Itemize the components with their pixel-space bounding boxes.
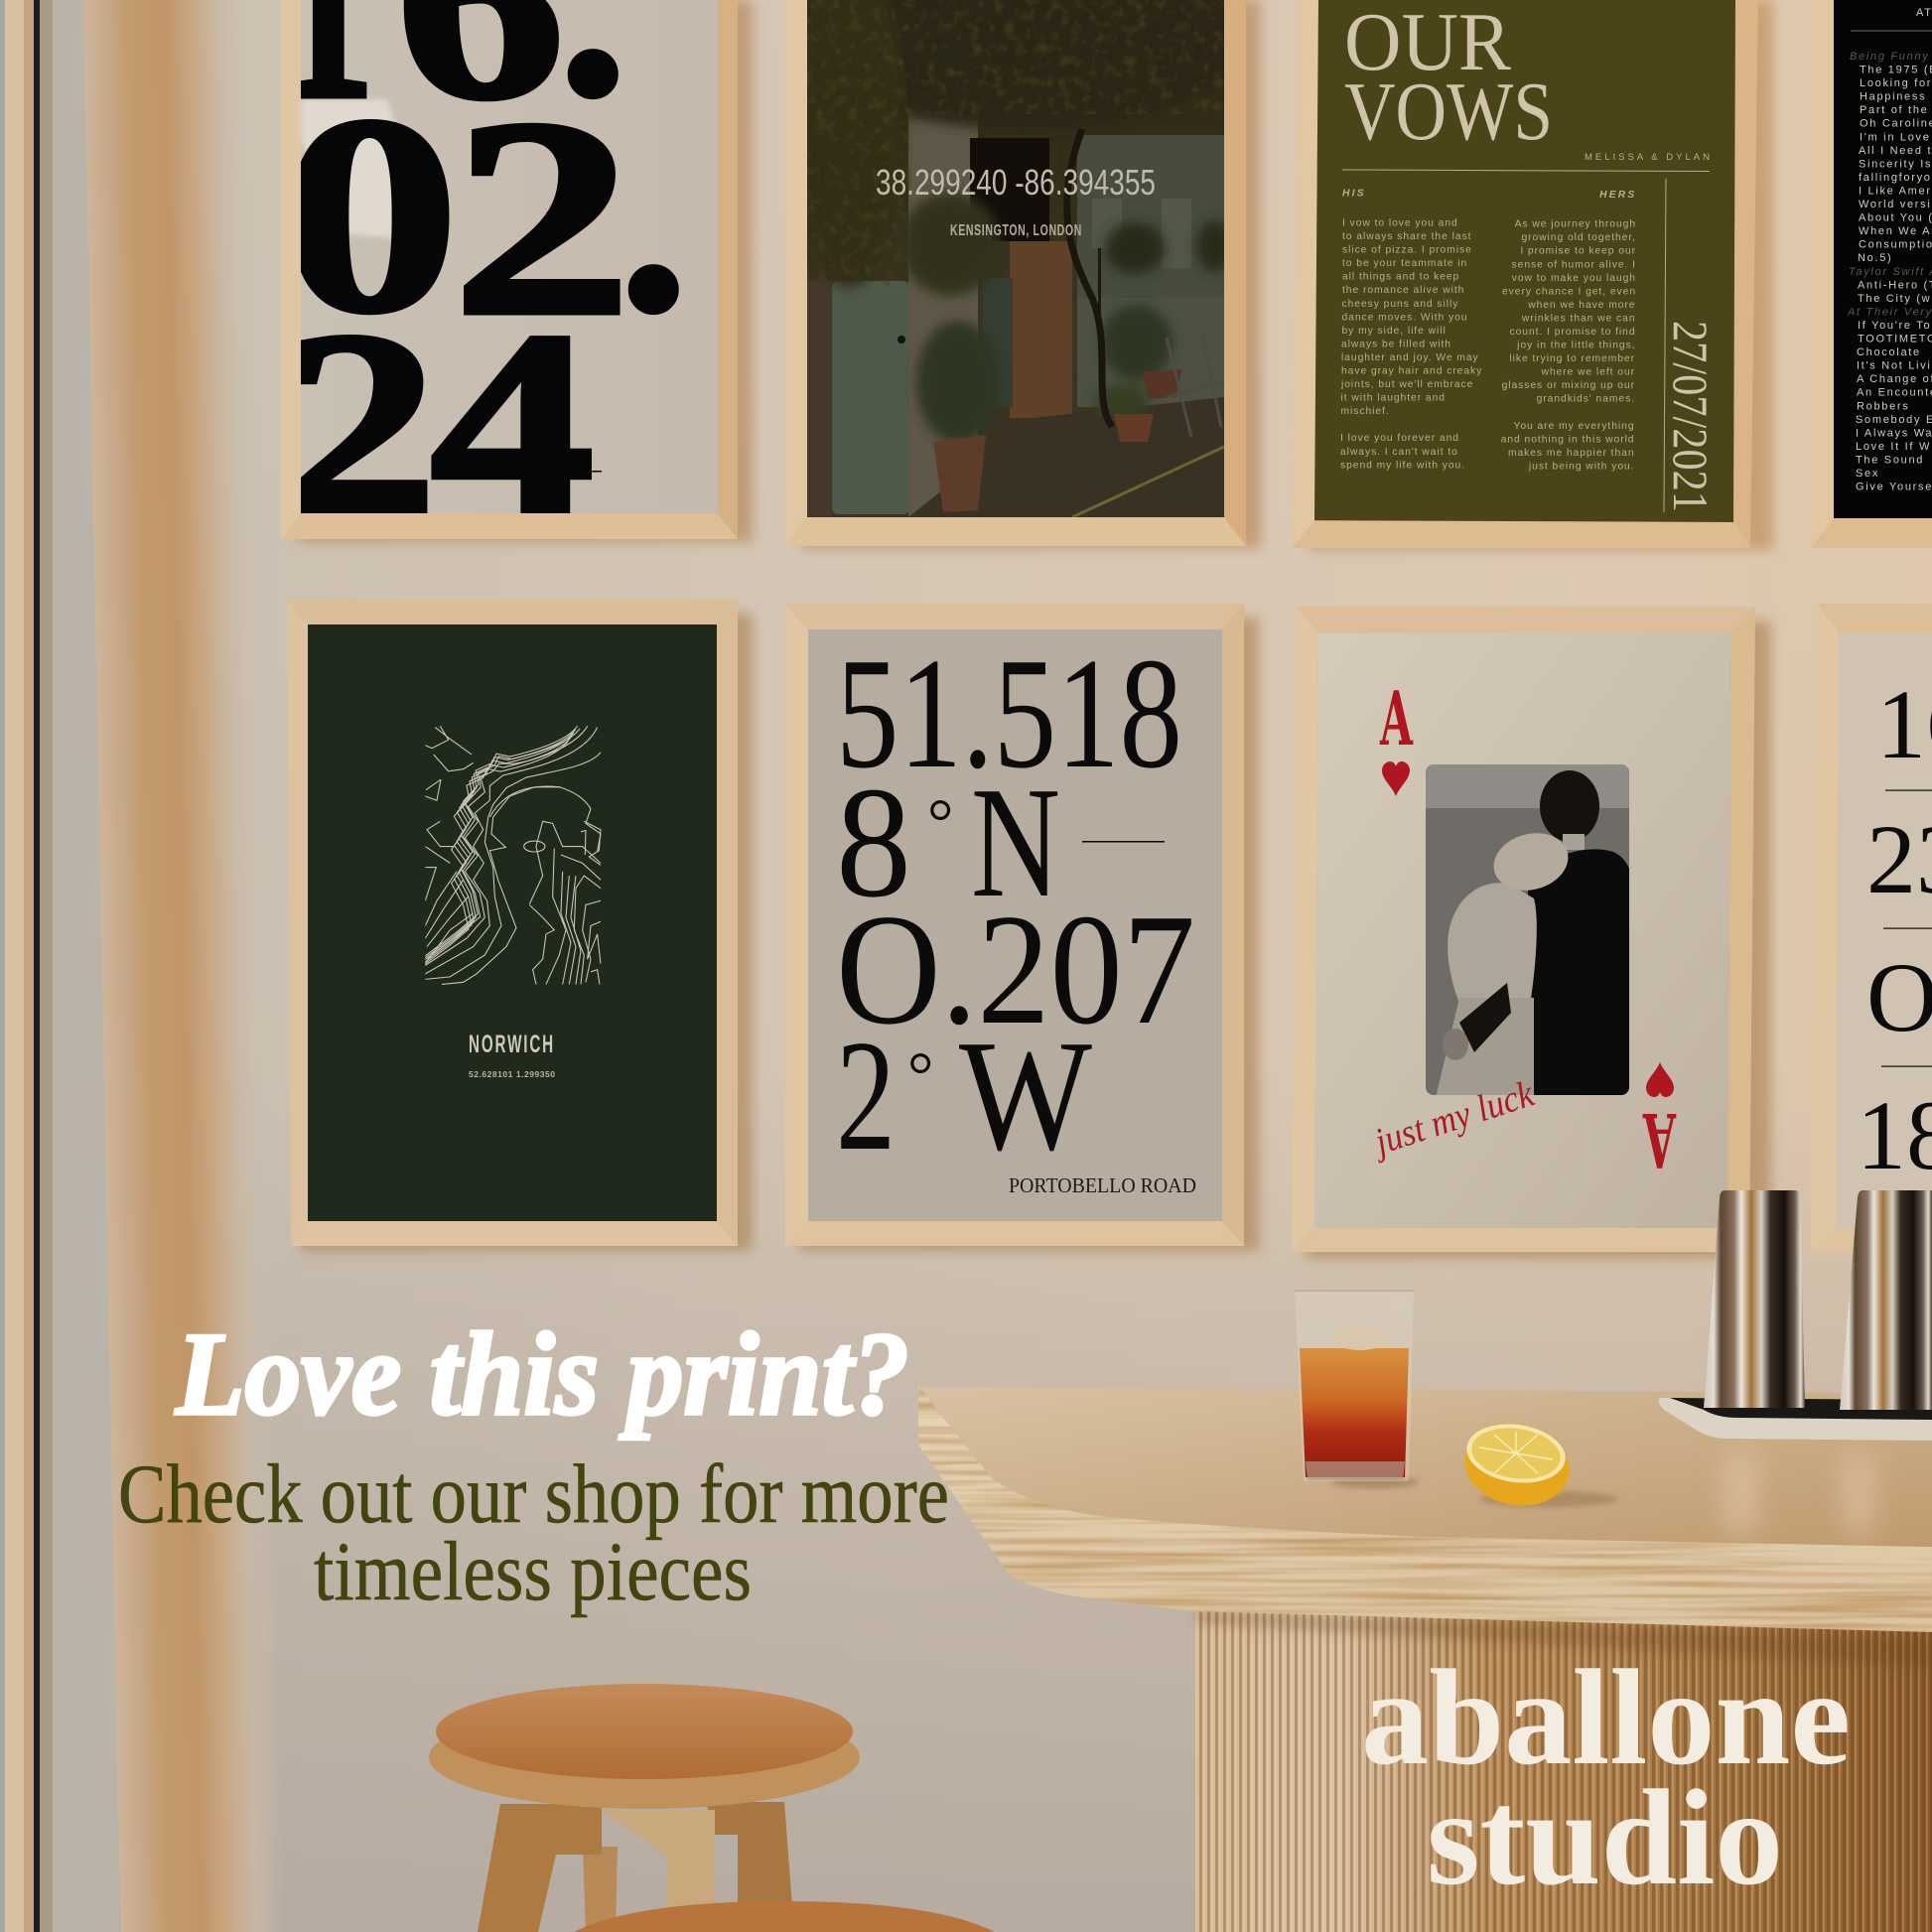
his vows column: mischief.	[1340, 406, 1390, 417]
subheading: timeless pieces	[314, 1525, 752, 1618]
his vows column: always be filled with	[1341, 339, 1451, 349]
print: 16.02.24 big numerals: 2	[452, 61, 632, 374]
frame 7 with ace of hearts print	[1292, 607, 1771, 1258]
playlist text: It's Not Livi	[1857, 360, 1932, 372]
print: large coordinates: W	[959, 1007, 1092, 1183]
playlist text: Looking for	[1860, 77, 1932, 89]
icon: iced drink glass	[1295, 1290, 1420, 1488]
frame 5 with Norwich contour print	[287, 600, 753, 1251]
location: KENSINGTON, LONDON	[950, 222, 1082, 239]
playlist text: At Their Very	[1847, 306, 1932, 318]
left window edge and curtain	[0, 0, 284, 1932]
playlist text: Sincerity Is	[1859, 158, 1932, 170]
his vows column: by my side, life will	[1342, 326, 1447, 337]
playlist text: The Sound	[1856, 455, 1924, 467]
frame 3 with vows print	[1292, 0, 1773, 550]
ace top left	[1379, 675, 1414, 796]
hers vows column: You are my everything	[1513, 421, 1634, 432]
brand wordmark: studio	[1427, 1761, 1783, 1913]
fluted bar base	[1195, 1610, 1932, 1932]
hers vows column: where we left our	[1540, 367, 1635, 378]
hers vows column: glasses or mixing up our	[1502, 380, 1635, 391]
playlist text: All I Need t	[1859, 145, 1932, 157]
bar counter	[913, 1190, 1932, 1932]
print: 16.02.24 big numerals: 2	[281, 278, 438, 569]
playlist text: Love It If W	[1856, 441, 1931, 453]
his vows column: always. I can't wait to	[1340, 447, 1458, 458]
his vows column: I love you forever and	[1340, 433, 1459, 444]
print: large coordinates: 8	[836, 754, 911, 930]
print: large coordinates	[836, 624, 1195, 1183]
frame 4 with playlist print	[1811, 0, 1932, 548]
his vows column: it with laughter and	[1340, 393, 1446, 404]
playlist text: Chocolate	[1857, 346, 1921, 358]
print: large coordinates: °	[927, 786, 953, 859]
his vows column: joints, but we'll embrace	[1340, 379, 1473, 390]
playlist text: Consumptio	[1859, 239, 1932, 251]
tray with shakers	[1659, 1190, 1932, 1441]
counter top	[920, 1387, 1932, 1547]
his vows column: to always share the last	[1342, 231, 1471, 242]
hers vows column: grandkids' names.	[1537, 394, 1635, 405]
hers vows column: growing old together,	[1521, 232, 1636, 243]
ace bottom right	[1642, 1062, 1677, 1183]
ace top left: A	[1379, 675, 1414, 762]
his vows column: have gray hair and creaky	[1341, 365, 1482, 377]
print title	[1344, 0, 1553, 158]
hers vows column: makes me happier than	[1508, 448, 1634, 459]
hers vows column: sense of humor alive. I	[1512, 259, 1636, 270]
ace bottom right: A	[1642, 1096, 1677, 1183]
print numerals	[1857, 669, 1932, 1190]
bar stool	[429, 1684, 995, 1932]
playlist text: World versi	[1859, 199, 1932, 210]
brand wordmark	[1361, 1641, 1851, 1913]
print: Kensington street photo	[794, 0, 1251, 517]
playlist text: About You (	[1859, 212, 1932, 224]
subheading: Check out our shop for more	[118, 1448, 949, 1541]
hers vows column: HERS	[1599, 190, 1636, 201]
playlist text: Happiness	[1860, 91, 1926, 103]
frame 8 with partial dates print	[1811, 604, 1932, 1252]
place name: NORWICH	[469, 1031, 555, 1058]
hers vows column: just being with you.	[1528, 462, 1634, 473]
print: large coordinates: 2	[836, 1007, 896, 1183]
place coordinates: 52.628101 1.299350	[469, 1069, 555, 1079]
his vows column: to be your teammate in	[1342, 258, 1467, 269]
counter edge	[913, 1380, 1932, 1638]
hers vows column: and nothing in this world	[1501, 435, 1634, 446]
print: 16.02.24 big numerals: 4	[430, 278, 595, 569]
playlist text: Sex	[1856, 468, 1879, 480]
frame 1 with date print	[276, 0, 753, 569]
icon: right shaker	[1840, 1190, 1932, 1410]
his vows column: spend my life with you.	[1340, 460, 1465, 471]
icon: left shaker	[1704, 1190, 1805, 1408]
his vows column: all things and to keep	[1342, 272, 1459, 283]
hers vows column: vow to make you laugh	[1512, 273, 1636, 284]
hers vows column: like trying to remember	[1509, 353, 1635, 364]
his vows column: laughter and joy. We may	[1341, 352, 1479, 363]
print: large coordinates: N	[971, 754, 1060, 930]
hers vows column	[1501, 190, 1636, 473]
headline: Love this print?	[175, 1308, 909, 1440]
his vows column: cheesy puns and silly	[1342, 299, 1458, 310]
his vows column: HIS	[1342, 189, 1366, 199]
print: 16.02.24 big numerals: .	[618, 53, 689, 371]
his vows column	[1340, 189, 1482, 471]
his vows column: I vow to love you and	[1342, 218, 1458, 228]
his vows column: slice of pizza. I promise	[1342, 245, 1472, 256]
playlist text: Robbers	[1857, 400, 1909, 412]
hers vows column: every chance I get, even	[1502, 286, 1636, 297]
frame 6 with coordinates print	[785, 604, 1259, 1251]
print: large coordinates: 51.518	[836, 624, 1182, 801]
subheading	[118, 1448, 949, 1618]
hers vows column: when we have more	[1527, 300, 1636, 311]
brand wordmark: aballone	[1361, 1641, 1851, 1793]
vertical date: 27/07/2021	[1663, 321, 1719, 512]
print: 16.02.24 big numerals	[301, 0, 679, 513]
hers vows column: As we journey through	[1515, 219, 1636, 230]
stool rim	[429, 1706, 860, 1809]
hers vows column: joy in the little things,	[1516, 340, 1636, 351]
print: large coordinates: °	[907, 1039, 933, 1112]
icon: lemon half	[1458, 1418, 1618, 1514]
coordinates: 38.299240 -86.394355	[876, 162, 1156, 203]
playlist text: If You're To	[1858, 320, 1931, 332]
his vows column: the romance alive with	[1342, 285, 1464, 296]
playlist text: Being Funny	[1850, 51, 1929, 63]
hers vows column: wrinkles than we can	[1521, 314, 1636, 324]
playlist text: Part of the	[1860, 104, 1928, 116]
playlist text: I'm in Love	[1860, 131, 1931, 143]
print: 16.02.24 big numerals: 0	[281, 58, 460, 371]
his vows column: dance moves. With you	[1342, 312, 1467, 323]
second stool seat	[574, 1901, 995, 1932]
contour map	[416, 726, 601, 984]
playlist text	[1847, 7, 1932, 493]
names: MELISSA & DYLAN	[1585, 152, 1710, 163]
script caption: just my luck	[1365, 1072, 1540, 1165]
playlist text: fallingforyo	[1859, 172, 1932, 184]
stool seat	[436, 1684, 853, 1779]
print caption: PORTOBELLO ROAD	[1009, 1173, 1196, 1197]
frame 2 with street photo print	[785, 0, 1261, 548]
print title: VOWS	[1344, 66, 1553, 158]
stool legs	[478, 1802, 794, 1932]
hers vows column: count. I promise to find	[1510, 327, 1636, 338]
print: large coordinates: O.207	[836, 881, 1195, 1057]
playlist text: I Always Wa	[1856, 427, 1932, 439]
playlist text: No.5)	[1858, 252, 1892, 264]
couple photo	[1426, 764, 1633, 1102]
hers vows column: I promise to keep our	[1520, 246, 1636, 257]
